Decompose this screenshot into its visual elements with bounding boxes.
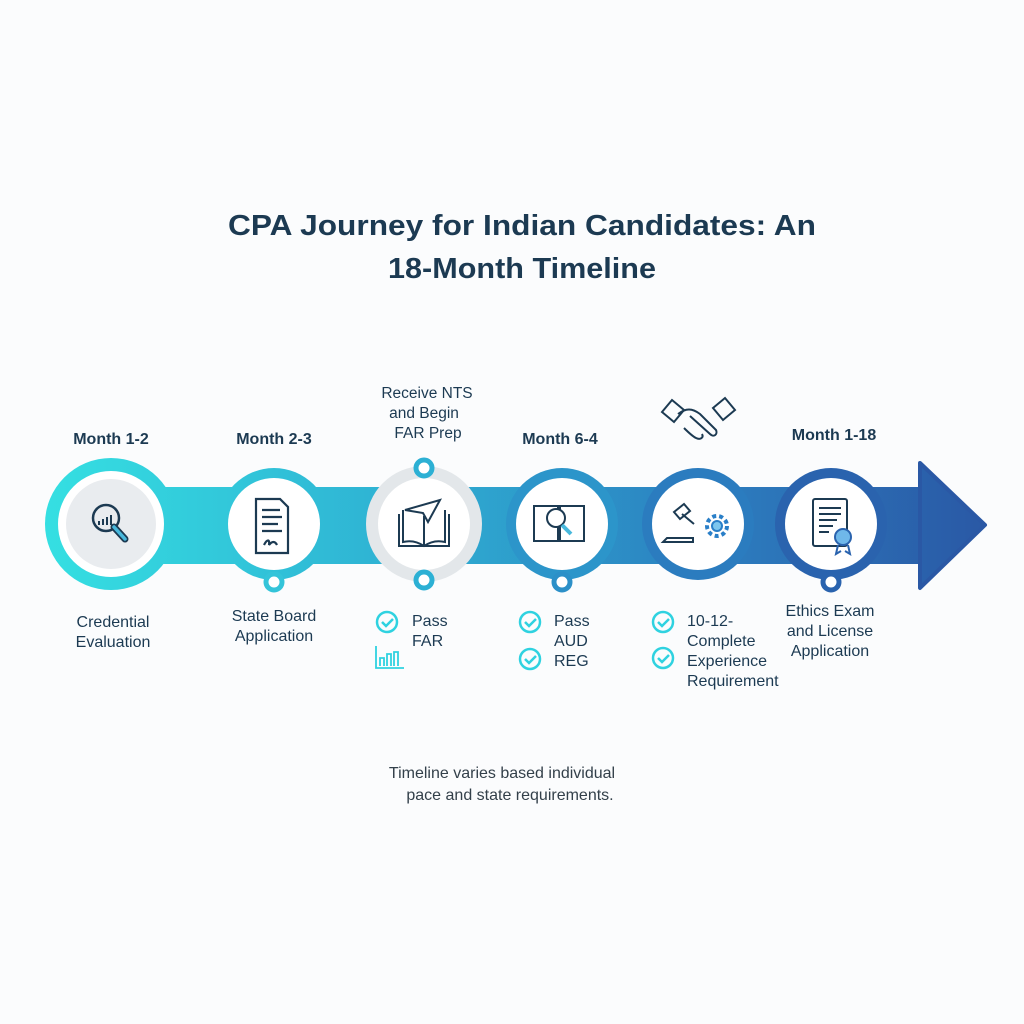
label: step texts: Ethics Exam — [786, 603, 874, 620]
labels: months: Month 6-4 — [522, 431, 598, 448]
label: step texts: State Board — [232, 608, 316, 625]
checklists: 10-12- — [687, 613, 733, 630]
label: receive NTS: and Begin — [389, 405, 459, 422]
checklists: REG — [554, 653, 589, 670]
step 4 circle — [506, 468, 618, 590]
label: step texts: Application — [235, 628, 313, 645]
checklists: Pass — [412, 613, 448, 630]
label: step texts: Evaluation — [76, 634, 150, 651]
label: step texts: Application — [791, 643, 869, 660]
icon: magnifier chart — [93, 505, 125, 539]
label: step texts: and License — [787, 623, 873, 640]
label: step texts — [76, 603, 874, 660]
footnote — [389, 765, 615, 804]
checklists: Pass — [554, 613, 590, 630]
icon: handshake — [662, 398, 735, 439]
checklists — [376, 612, 779, 690]
checklists: FAR — [412, 633, 443, 650]
step 1 circle — [45, 458, 177, 590]
checklists: AUD — [554, 633, 588, 650]
label: receive NTS: FAR Prep — [394, 425, 462, 442]
footnote: Timeline varies based individual — [389, 765, 615, 782]
icon: document — [256, 499, 288, 553]
labels: months — [73, 427, 876, 448]
labels: months: Month 1-18 — [792, 427, 876, 444]
labels: months: Month 1-2 — [73, 431, 149, 448]
icon: book with paper plane — [399, 500, 449, 546]
timeline arrow — [100, 463, 985, 588]
checklists: Experience — [687, 653, 767, 670]
title — [228, 210, 816, 285]
checklists: Complete — [687, 633, 756, 650]
label: receive NTS: Receive NTS — [381, 385, 473, 402]
title: 18-Month Timeline — [388, 253, 656, 285]
label: receive NTS — [381, 385, 473, 442]
icon: book magnifier — [534, 506, 584, 541]
step 2 circle — [218, 468, 330, 590]
step 3 circle — [366, 460, 482, 588]
step 6 circle — [775, 468, 887, 590]
label: step texts: Credential — [77, 614, 149, 631]
labels: months: Month 2-3 — [236, 431, 312, 448]
title: CPA Journey for Indian Candidates: An — [228, 210, 816, 242]
icon: gavel and gear — [663, 504, 727, 542]
footnote: pace and state requirements. — [406, 787, 614, 804]
step 5 circle — [642, 468, 754, 580]
checklists: Requirement — [687, 673, 779, 690]
icon: certificate — [813, 499, 851, 554]
